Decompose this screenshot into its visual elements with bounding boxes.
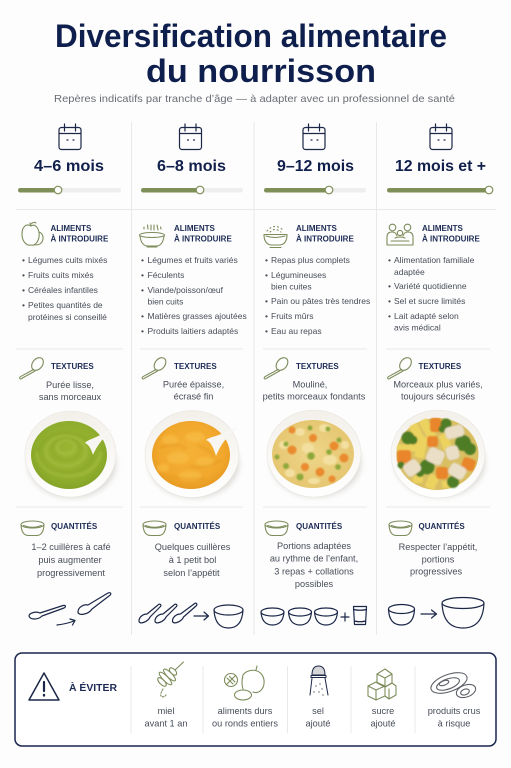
age heading: 6–8 mois (157, 158, 226, 175)
heading: à éviter: À ÉVITER (69, 681, 117, 694)
food list: Petites quantités de (28, 300, 103, 310)
food list: • (22, 300, 25, 310)
food list: • (265, 296, 268, 306)
food list: • (265, 255, 268, 265)
icon: spoons to bowl (139, 603, 243, 628)
texture description: petits morceaux fondants (263, 392, 366, 402)
icon: bowl with grains (264, 226, 287, 248)
texture description: sans morceaux (39, 392, 102, 402)
icon: sugar cubes (368, 669, 396, 700)
title: Diversification alimentaire (55, 18, 447, 54)
icon: honey dipper (156, 662, 184, 697)
heading: quantités: QUANTITÉS (51, 522, 98, 531)
icon: spoons with arrow (29, 593, 111, 625)
food list: protéines si conseillé (28, 312, 107, 322)
food list: • (141, 255, 144, 265)
icon: bowl (265, 521, 288, 536)
icon: spoon (388, 355, 414, 379)
icon: bowl (21, 521, 44, 536)
food list: Légumineuses (271, 270, 326, 280)
heading: aliments: À INTRODUIRE (422, 234, 480, 244)
icon: warning triangle (29, 673, 59, 700)
progress slider (18, 186, 121, 194)
food list: Fruits cuits mixés (28, 270, 94, 280)
icon: calendar (59, 124, 81, 150)
label: sel: ajouté (305, 718, 331, 728)
texture description: Mouliné, (293, 380, 327, 390)
food list: • (22, 270, 25, 280)
quantity description: progressives (410, 566, 462, 576)
heading: aliments: ALIMENTS (174, 224, 216, 233)
title: du nourrisson (146, 53, 376, 89)
food list: Sel et sucre limités (394, 296, 465, 306)
icon: bowl (389, 521, 412, 536)
food list: Repas plus complets (271, 255, 350, 265)
food list: Eau au repas (271, 326, 322, 336)
age heading: 12 mois et + (395, 158, 486, 175)
food list: bien cuits (148, 296, 183, 306)
quantity description: à 1 petit bol (169, 555, 216, 565)
texture description: Purée épaisse, (163, 380, 224, 390)
quantity description: 3 repas + collations (274, 566, 354, 576)
food list: • (388, 311, 391, 321)
heading: textures: TEXTURES (174, 362, 217, 371)
food list: • (22, 255, 25, 265)
texture description: Morceaux plus variés, (393, 380, 483, 390)
quantity description: Respecter l’appétit, (399, 542, 477, 552)
food list: avis médical (394, 322, 441, 332)
icon: salt grains (313, 683, 324, 696)
texture description: toujours sécurisés (401, 392, 475, 402)
food list: • (141, 326, 144, 336)
heading: aliments: À INTRODUIRE (296, 234, 354, 244)
quantity description: au rythme de l’enfant, (270, 554, 358, 564)
quantity description: Quelques cuillères (155, 542, 231, 552)
panel: 4–6 mois (18, 124, 121, 625)
icon: calendar (430, 124, 452, 150)
heading: aliments: À INTRODUIRE (174, 234, 232, 244)
icon: apple (22, 222, 43, 245)
heading: textures: TEXTURES (296, 362, 339, 371)
food list: • (388, 255, 391, 265)
progress slider (264, 186, 366, 194)
icon: raw products (428, 669, 477, 700)
heading: textures: TEXTURES (51, 362, 94, 371)
quantity description: progressivement (37, 568, 105, 578)
food list: • (22, 285, 25, 295)
quantity description: selon l’appétit (163, 568, 220, 578)
quantity description: Portions adaptées (277, 541, 351, 551)
icon: spoon (142, 355, 168, 379)
food list: Légumes cuits mixés (28, 255, 107, 265)
quantity description: puis augmenter (38, 555, 102, 565)
label: miel: avant 1 an (145, 718, 187, 728)
food list: • (141, 285, 144, 295)
heading: aliments: ALIMENTS (296, 224, 338, 233)
age heading: 9–12 mois (277, 158, 354, 175)
food list: adaptée (394, 267, 425, 277)
icon: bowls plus glass (261, 606, 366, 625)
label: miel: miel (158, 706, 174, 716)
texture description: écrasé fin (174, 392, 213, 402)
label: sucre: sucre (372, 706, 394, 716)
icon: hard round foods (224, 666, 264, 700)
photo: green puree bowl (25, 411, 116, 498)
panel: à éviter (15, 653, 496, 746)
food list: bien cuites (271, 282, 312, 292)
label: sel: sel (312, 706, 324, 716)
food list: • (265, 311, 268, 321)
panel: 12 mois et + (387, 124, 493, 628)
food list: Viande/poisson/œuf (148, 285, 224, 295)
food list: • (388, 281, 391, 291)
food list: • (141, 311, 144, 321)
title (55, 18, 447, 89)
heading: aliments: À INTRODUIRE (50, 234, 109, 244)
heading: aliments: ALIMENTS (50, 224, 92, 233)
texture description: Purée lisse, (46, 380, 94, 390)
photo: mashed vegetable bowl (267, 410, 361, 497)
label: produits crus: à risque (438, 718, 470, 728)
heading: quantités: QUANTITÉS (296, 522, 343, 531)
quantity description: portions (422, 554, 455, 564)
food list: Produits laitiers adaptés (148, 326, 238, 336)
food list: • (265, 270, 268, 280)
icon: steaming bowl (140, 225, 164, 247)
icon: calendar (303, 124, 325, 150)
heading: aliments: ALIMENTS (422, 224, 464, 233)
food list: Pain ou pâtes très tendres (271, 296, 370, 306)
icon: family (387, 224, 413, 245)
heading: textures: TEXTURES (418, 362, 462, 371)
icon: calendar (180, 124, 202, 150)
progress slider (141, 186, 243, 194)
food list: • (388, 296, 391, 306)
progress slider (387, 186, 493, 194)
heading: quantités: QUANTITÉS (418, 522, 465, 531)
label: aliments durs: aliments durs (218, 706, 273, 716)
icon: salt shaker (310, 666, 328, 695)
label: sucre: ajouté (370, 718, 396, 728)
food list: Alimentation familiale (394, 255, 475, 265)
food list: • (265, 326, 268, 336)
label: aliments durs: ou ronds entiers (212, 718, 278, 728)
food list: Matières grasses ajoutées (148, 311, 247, 321)
photo: orange puree bowl (145, 410, 239, 498)
photo: vegetable pieces bowl (391, 410, 485, 498)
food list: • (141, 270, 144, 280)
food list: Céréales infantiles (28, 285, 98, 295)
heading: quantités: QUANTITÉS (174, 522, 221, 531)
quantity description: possibles (295, 579, 334, 589)
food list: Fruits mûrs (271, 311, 314, 321)
food list: Féculents (148, 270, 184, 280)
label: produits crus: produits crus (428, 706, 481, 716)
panel: 9–12 mois (261, 124, 370, 625)
icon: spoon (20, 355, 46, 379)
subtitle: Repères indicatifs par tranche d’âge — à adapter avec un professionnel de santé (54, 93, 455, 105)
panel: 6–8 mois (139, 124, 247, 628)
age heading: 4–6 mois (34, 158, 104, 175)
food list: Légumes et fruits variés (148, 255, 238, 265)
icon: bowl to larger bowl (388, 598, 484, 628)
quantity description: 1–2 cuillères à café (31, 542, 111, 552)
food list: Variété quotidienne (394, 281, 467, 291)
icon: spoon (264, 355, 290, 379)
food list: Lait adapté selon (394, 311, 459, 321)
icon: bowl (143, 521, 166, 536)
